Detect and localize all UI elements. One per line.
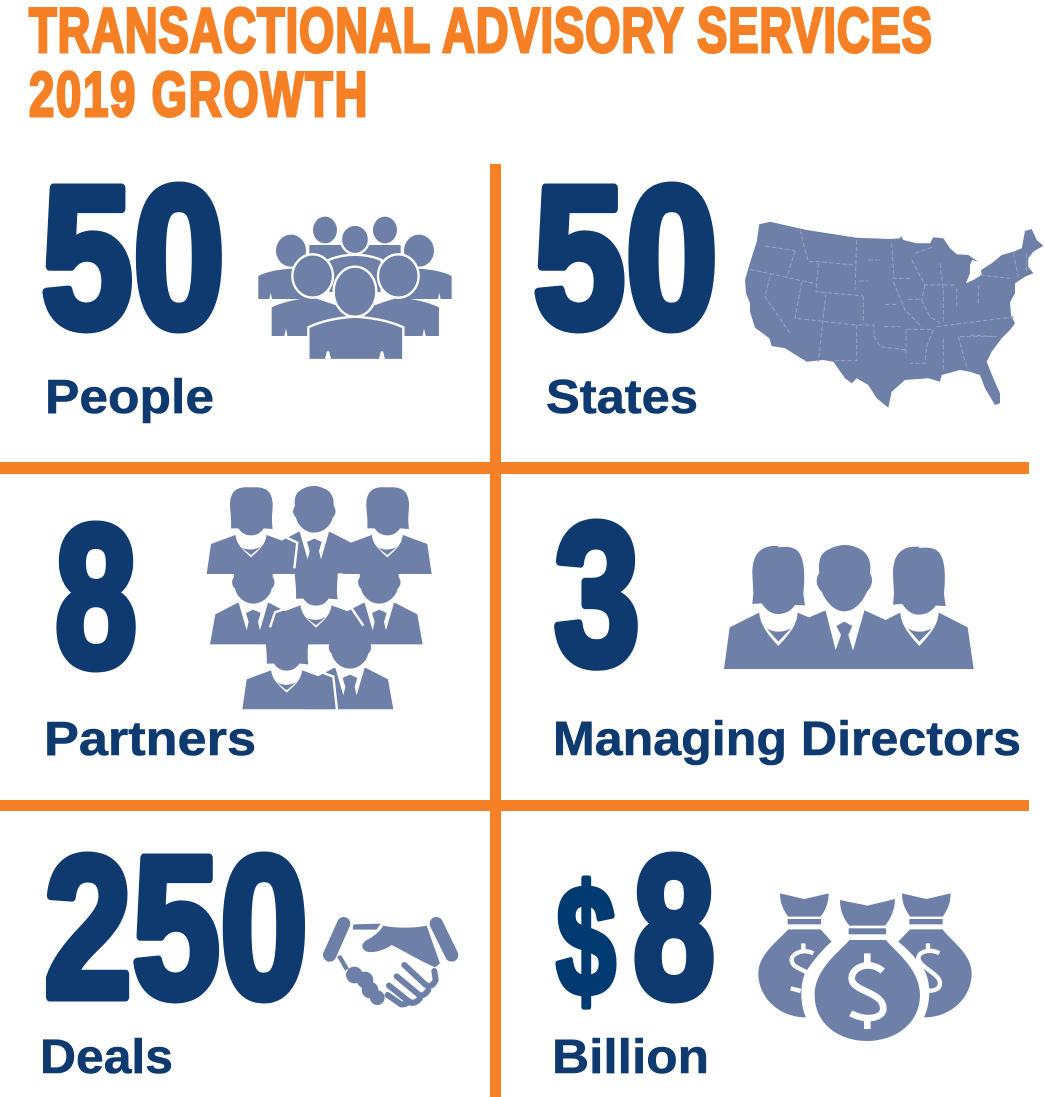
title: 2019 GROWTH <box>29 59 367 130</box>
icon: map of the United States <box>745 222 1043 408</box>
icon: three business people <box>724 545 974 669</box>
title <box>29 0 932 130</box>
icon: money bags <box>758 893 972 1041</box>
panel: partners <box>44 483 432 766</box>
number: 50 states: 50 <box>533 144 718 370</box>
number: 8 partners: 8 <box>55 483 137 709</box>
label: partners: Partners <box>44 713 256 766</box>
number: $8 billion <box>556 814 715 1040</box>
label: billion: Billion <box>552 1031 709 1084</box>
icon: handshake <box>330 924 452 1005</box>
label: states: States <box>546 371 698 424</box>
label: managing directors: Managing Directors <box>553 713 1021 766</box>
number: 250 deals: 250 <box>44 814 308 1040</box>
number: $8 billion: 8 <box>633 814 715 1040</box>
label: deals: Deals <box>40 1031 173 1084</box>
label: people: People <box>45 371 214 424</box>
number: $8 billion: $ <box>556 854 616 1029</box>
number: 50 people: 50 <box>41 144 225 370</box>
number: 3 managing directors: 3 <box>554 481 640 707</box>
panel: managing directors <box>553 481 1021 766</box>
panel: states <box>533 144 1043 424</box>
panel: deals <box>40 814 452 1084</box>
icon: crowd of people <box>258 217 452 360</box>
icon: eight business people <box>207 486 432 710</box>
panel: people <box>41 144 452 424</box>
panel: billion <box>552 814 972 1084</box>
